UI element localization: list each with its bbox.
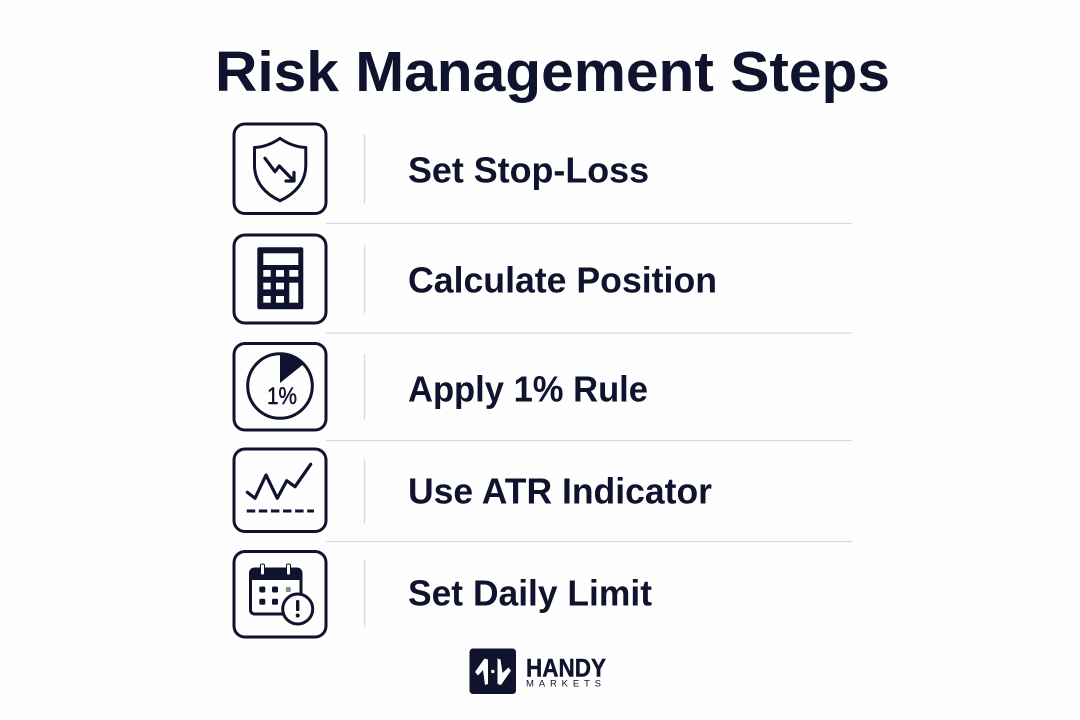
label: Set Stop-Loss: Set Stop-Loss	[408, 150, 649, 190]
title: Risk Management Steps	[215, 40, 890, 104]
icon: 1% pie	[234, 344, 326, 430]
row: Calculate Position	[234, 235, 717, 323]
icon: calculator	[234, 235, 326, 323]
logo wordmark: MARKETS	[526, 678, 601, 689]
label: Use ATR Indicator: Use ATR Indicator	[408, 470, 712, 512]
logo wordmark: HANDY	[526, 655, 606, 683]
label: Set Daily Limit: Set Daily Limit	[408, 572, 652, 614]
row: Apply 1% Rule	[234, 344, 648, 430]
logo: Handy Markets	[470, 648, 606, 694]
row: Use ATR Indicator	[234, 449, 712, 532]
logo mark	[470, 648, 516, 694]
row: Set Daily Limit	[234, 552, 652, 637]
label: Apply 1% Rule: Apply 1% Rule	[408, 368, 648, 410]
label: Calculate Position: Calculate Position	[408, 260, 717, 300]
row: Set Stop-Loss	[234, 124, 649, 214]
icon: calendar with alert	[234, 552, 326, 637]
icon: ATR line chart	[234, 449, 326, 532]
icon: 1% pie: 1%	[267, 383, 297, 410]
icon: shield with falling arrow	[234, 124, 326, 214]
